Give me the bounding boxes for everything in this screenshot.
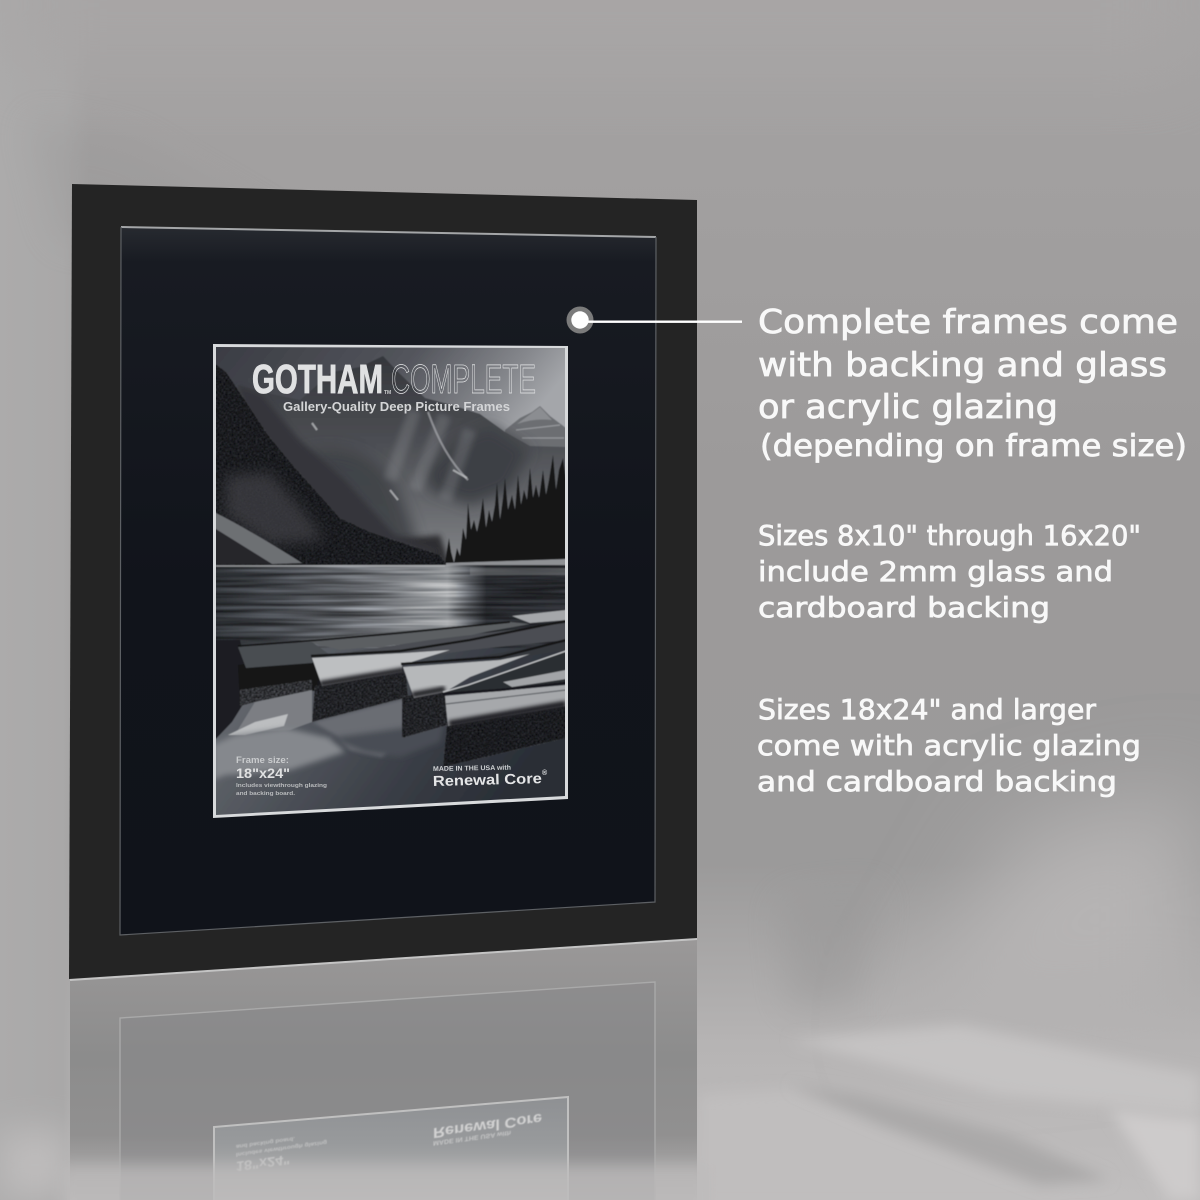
photo canoe 1 bbox=[238, 622, 530, 668]
callout heading: with backing and glass bbox=[758, 345, 1167, 384]
photo distant right peak bbox=[504, 406, 565, 448]
text block: sizes 8x10 through 16x20: include 2mm glass and bbox=[758, 555, 1113, 588]
photo label: Renewal Core: ® bbox=[542, 769, 548, 777]
frame reflection on the floor: 18"x24" bbox=[236, 1152, 290, 1174]
callout heading: Complete frames come bbox=[758, 302, 1178, 341]
callout heading bbox=[758, 302, 1187, 464]
photo heading: GOTHAM logotype: GOTHAM bbox=[252, 356, 383, 402]
text block: sizes 18x24 and larger bbox=[757, 693, 1141, 798]
photo canoes bbox=[238, 610, 566, 726]
glazing and dark inner panel bbox=[120, 227, 656, 935]
photo insert with white mat border bbox=[213, 344, 570, 820]
photo label: frame size: and backing board. bbox=[236, 791, 295, 797]
photo pine trees on right shore bbox=[445, 455, 570, 570]
frame reflection on the floor: Includes viewthrough glazing bbox=[236, 1139, 328, 1157]
frame reflection on the floor: MADE IN THE USA with bbox=[433, 1129, 511, 1146]
text block: sizes 18x24 and larger: Sizes 18x24" and larger bbox=[758, 693, 1096, 726]
photo lower water and sky reflection bbox=[213, 640, 568, 820]
photo label: Renewal Core bbox=[433, 765, 548, 790]
photo lake water bbox=[213, 565, 568, 650]
photo canoe 2 bbox=[311, 621, 566, 686]
text block: sizes 8x10 through 16x20 bbox=[758, 519, 1141, 624]
frame reflection on the floor: and backing board. bbox=[236, 1135, 295, 1149]
text block: sizes 8x10 through 16x20: cardboard backing bbox=[758, 591, 1050, 624]
photo heading: COMPLETE outline logotype: COMPLETE bbox=[391, 356, 536, 402]
photo label: frame size: Includes viewthrough glazing bbox=[236, 783, 328, 789]
frame reflection on the floor bbox=[60, 939, 710, 1200]
photo sky bbox=[216, 347, 565, 432]
frame reflection on the floor: Renewal Core bbox=[433, 1110, 542, 1140]
photo label: frame size: 18"x24" bbox=[236, 766, 290, 781]
photo central mountain massif bbox=[271, 356, 565, 563]
black picture frame bbox=[69, 184, 697, 979]
callout heading: or acrylic glazing bbox=[758, 387, 1058, 426]
text block: sizes 18x24 and larger: come with acrylic glazing bbox=[757, 729, 1141, 762]
photo shoreline bbox=[445, 558, 565, 566]
photo canoe 4 bbox=[443, 651, 566, 726]
text block: sizes 8x10 through 16x20: Sizes 8x10" through 16x20" bbox=[758, 519, 1141, 552]
text block: sizes 18x24 and larger: and cardboard backing bbox=[757, 765, 1117, 798]
photo heading: trademark mark: TM bbox=[384, 390, 391, 396]
photo label: Renewal Core: Renewal Core bbox=[433, 771, 542, 790]
photo label: Renewal Core: MADE IN THE USA with bbox=[433, 765, 511, 773]
callout heading: (depending on frame size) bbox=[760, 429, 1187, 464]
photo dark forested slope on left bbox=[213, 362, 448, 566]
photo label: frame size bbox=[236, 755, 328, 797]
callout marker and leader line bbox=[566, 306, 742, 334]
photo label: frame size: Frame size: bbox=[236, 755, 289, 766]
photo subtitle: Gallery-Quality Deep Picture Frames bbox=[283, 399, 510, 414]
photo canoe 3 bbox=[401, 640, 566, 698]
